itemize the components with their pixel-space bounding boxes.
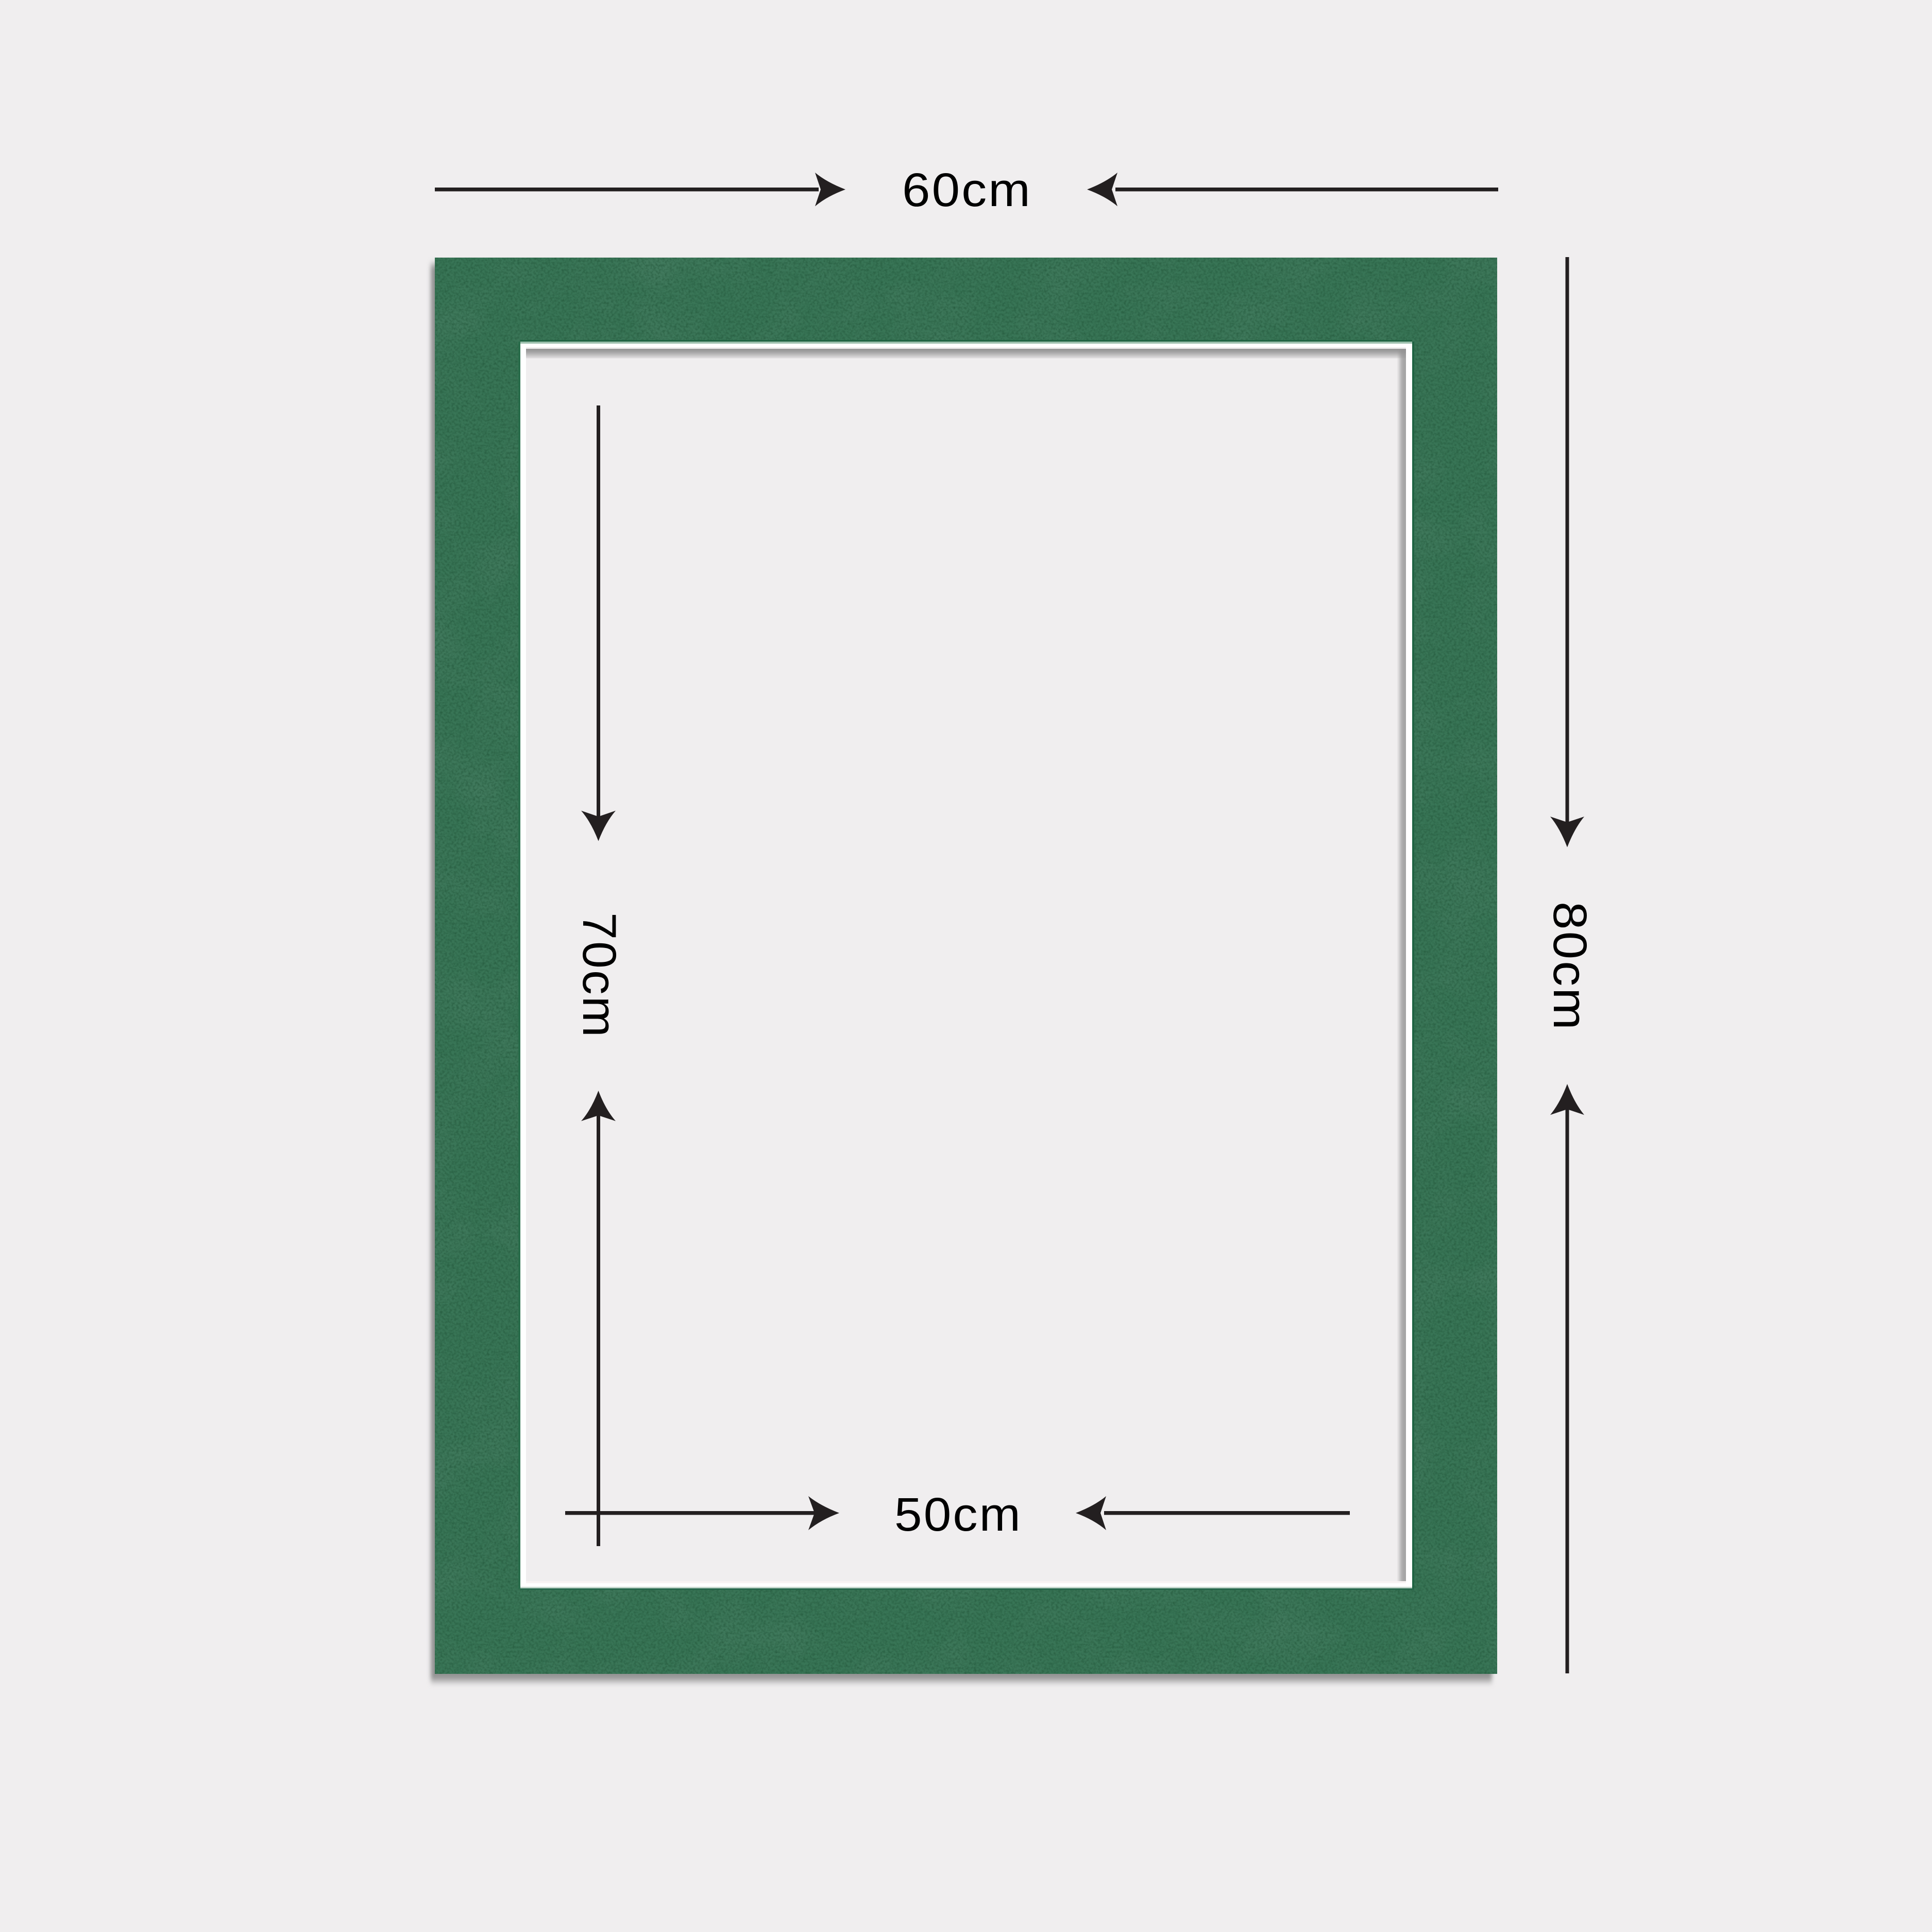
arrow: 50cm right — [1076, 1496, 1350, 1530]
label: 60cm: 60cm — [902, 164, 1032, 216]
bevel edge details — [518, 340, 1414, 1590]
arrow: 80cm bottom — [1550, 1084, 1584, 1673]
board drop shadow — [431, 264, 1492, 1681]
label: 80cm: 80cm — [1544, 902, 1596, 1031]
arrow: 50cm left — [565, 1496, 839, 1530]
label: 50cm: 50cm — [894, 1488, 1022, 1541]
arrow: 70cm top — [581, 405, 616, 841]
green mount frame — [435, 258, 1497, 1674]
arrow: 70cm bottom — [581, 1091, 616, 1546]
panel: mount board with opening — [431, 258, 1497, 1681]
opening background — [526, 347, 1406, 1581]
arrow: 60cm right — [1087, 173, 1498, 206]
white bevel of the opening — [520, 344, 1412, 1587]
inner shadow on opening — [464, 289, 1468, 1674]
label: 70cm: 70cm — [573, 912, 625, 1039]
arrow: 80cm top — [1550, 257, 1584, 847]
arrow: 60cm left — [435, 173, 845, 206]
